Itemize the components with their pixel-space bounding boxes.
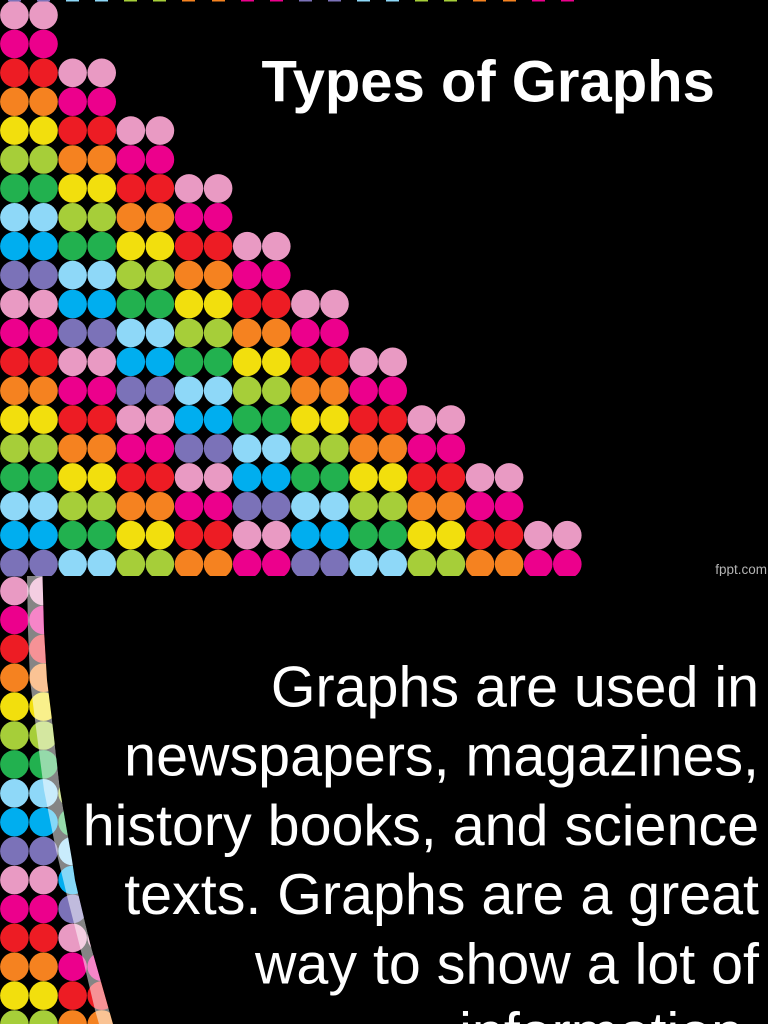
body text: Graphs are used in bbox=[271, 656, 759, 720]
body text: newspapers, magazines, bbox=[124, 724, 759, 788]
dot staircase: lower slide bbox=[0, 576, 113, 1024]
body text: texts. Graphs are a great bbox=[124, 863, 759, 927]
body text: way to show a lot of bbox=[254, 932, 760, 996]
dot slivers along top edge bbox=[8, 0, 574, 2]
title: Types of Graphs bbox=[262, 50, 715, 114]
watermark: fppt.com bbox=[715, 562, 767, 577]
translucent curved band bbox=[27, 576, 113, 1024]
dot staircase: upper slide bbox=[0, 2, 582, 576]
black text panel bbox=[42, 576, 768, 1024]
body text bbox=[83, 656, 760, 1024]
body text: history books, and science bbox=[83, 794, 759, 858]
